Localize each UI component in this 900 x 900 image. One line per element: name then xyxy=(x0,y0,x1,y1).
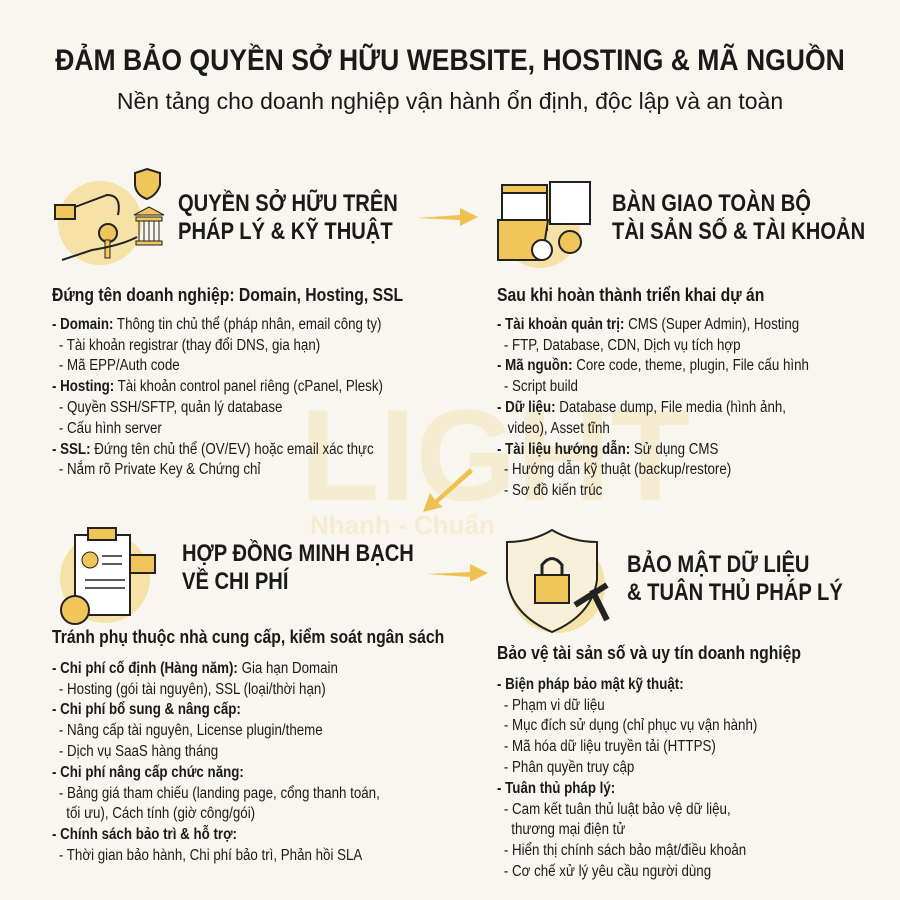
panel: security text: - Cơ chế xử lý yêu cầu người dùng xyxy=(504,863,711,880)
panel: ownership text: - Quyền SSH/SFTP, quản lý database xyxy=(59,399,282,416)
panel: ownership text: - Domain: Thông tin chủ thể (pháp nhân, email công ty) xyxy=(52,316,381,333)
panel: handover text: - Sơ đồ kiến trúc xyxy=(504,482,602,499)
panel: security text: thương mại điện tử xyxy=(511,821,625,838)
panel: contract text: Tránh phụ thuộc nhà cung cấp, kiểm soát ngân sách xyxy=(52,626,444,647)
heading: bảo mật xyxy=(627,550,843,606)
heading: hợp đồng: HỢP ĐỒNG MINH BẠCH xyxy=(182,540,414,567)
panel: contract text: - Chính sách bảo trì & hỗ trợ: xyxy=(52,826,237,843)
panel: contract text: - Thời gian bảo hành, Chi phí bảo trì, Phản hồi SLA xyxy=(59,847,362,864)
panel: contract text: - Nâng cấp tài nguyên, License plugin/theme xyxy=(59,722,323,739)
panel: contract text: - Dịch vụ SaaS hàng tháng xyxy=(59,743,218,760)
panel: security text: - Mục đích sử dụng (chỉ phục vụ vận hành) xyxy=(504,717,757,734)
heading: quyền sở hữu: PHÁP LÝ & KỸ THUẬT xyxy=(178,218,393,245)
panel: contract text: - Bảng giá tham chiếu (landing page, cổng thanh toán, xyxy=(59,785,380,802)
heading: bảo mật: BẢO MẬT DỮ LIỆU xyxy=(627,551,809,578)
panel: ownership text: - Nắm rõ Private Key & Chứng chỉ xyxy=(59,461,260,478)
heading: bảo mật: & TUÂN THỦ PHÁP LÝ xyxy=(627,579,843,606)
panel: contract text: - Hosting (gói tài nguyên), SSL (loại/thời hạn) xyxy=(59,681,326,698)
panel: handover text: - Tài liệu hướng dẫn: Sử dụng CMS xyxy=(497,441,718,458)
heading: hợp đồng xyxy=(182,539,414,595)
panel: security text: - Cam kết tuân thủ luật bảo vệ dữ liệu, xyxy=(504,801,731,818)
panel: handover text: - Tài khoản quản trị: CMS (Super Admin), Hosting xyxy=(497,316,799,333)
panel: contract text: tối ưu), Cách tính (giờ công/gói) xyxy=(66,805,255,822)
panel: handover text: Sau khi hoàn thành triển khai dự án xyxy=(497,284,764,305)
panel: contract text xyxy=(52,626,444,864)
heading: quyền sở hữu: QUYỀN SỞ HỮU TRÊN xyxy=(178,190,398,217)
panel: ownership text: - Mã EPP/Auth code xyxy=(59,357,180,374)
arrow down-left xyxy=(423,468,473,512)
panel: ownership text: - Tài khoản registrar (thay đổi DNS, gia hạn) xyxy=(59,337,320,354)
panel: security text: - Biện pháp bảo mật kỹ thuật: xyxy=(497,676,684,693)
panel: security text: Bảo vệ tài sản số và uy tín doanh nghiệp xyxy=(497,642,801,663)
panel: ownership text: - Hosting: Tài khoản control panel riêng (cPanel, Plesk) xyxy=(52,378,383,395)
panel: security text: - Hiển thị chính sách bảo mật/điều khoản xyxy=(504,842,746,859)
icon: shield lock gavel xyxy=(506,528,610,634)
panel: ownership text: - Cấu hình server xyxy=(59,420,162,437)
panel: contract text: - Chi phí nâng cấp chức năng: xyxy=(52,764,244,781)
panel: handover text xyxy=(497,284,809,499)
panel: handover text: - Dữ liệu: Database dump, File media (hình ảnh, xyxy=(497,399,786,416)
heading: bàn giao: TÀI SẢN SỐ & TÀI KHOẢN xyxy=(612,218,865,245)
panel: contract text: - Chi phí bổ sung & nâng cấp: xyxy=(52,701,241,718)
watermark: Nhanh - Chuẩn xyxy=(310,510,495,540)
icon: contract xyxy=(60,527,156,625)
arrow right 2 xyxy=(428,564,488,582)
panel: handover text: - FTP, Database, CDN, Dịch vụ tích hợp xyxy=(504,337,741,354)
panel: handover text: video), Asset tĩnh xyxy=(508,420,610,437)
arrow right xyxy=(418,208,478,226)
panel: handover text: - Script build xyxy=(504,378,578,395)
panel: ownership text xyxy=(52,284,403,478)
icon: code files xyxy=(497,181,591,268)
title: ĐẢM BẢO QUYỀN SỞ HỮU WEBSITE, HOSTING & MÃ NGUỒN xyxy=(55,44,845,77)
panel: security text: - Tuân thủ pháp lý: xyxy=(497,780,615,797)
heading: bàn giao: BÀN GIAO TOÀN BỘ xyxy=(612,190,811,217)
heading: bàn giao xyxy=(612,189,865,245)
watermark: LIGHT xyxy=(300,382,690,528)
panel: handover text: - Hướng dẫn kỹ thuật (backup/restore) xyxy=(504,461,731,478)
panel: security text: - Phân quyền truy cập xyxy=(504,759,634,776)
panel: security text xyxy=(497,642,801,880)
panel: handover text: - Mã nguồn: Core code, theme, plugin, File cấu hình xyxy=(497,357,809,374)
panel: ownership text: Đứng tên doanh nghiệp: Domain, Hosting, SSL xyxy=(52,284,403,305)
panel: security text: - Mã hóa dữ liệu truyền tải (HTTPS) xyxy=(504,738,716,755)
heading: hợp đồng: VỀ CHI PHÍ xyxy=(182,568,288,595)
panel: contract text: - Chi phí cố định (Hàng năm): Gia hạn Domain xyxy=(52,660,338,677)
panel: security text: - Phạm vi dữ liệu xyxy=(504,697,605,714)
heading: quyền sở hữu xyxy=(178,189,398,245)
icon: keys hand xyxy=(54,168,164,265)
subtitle: Nền tảng cho doanh nghiệp vận hành ổn định, độc lập và an toàn xyxy=(117,88,783,114)
panel: ownership text: - SSL: Đứng tên chủ thể (OV/EV) hoặc email xác thực xyxy=(52,441,374,458)
